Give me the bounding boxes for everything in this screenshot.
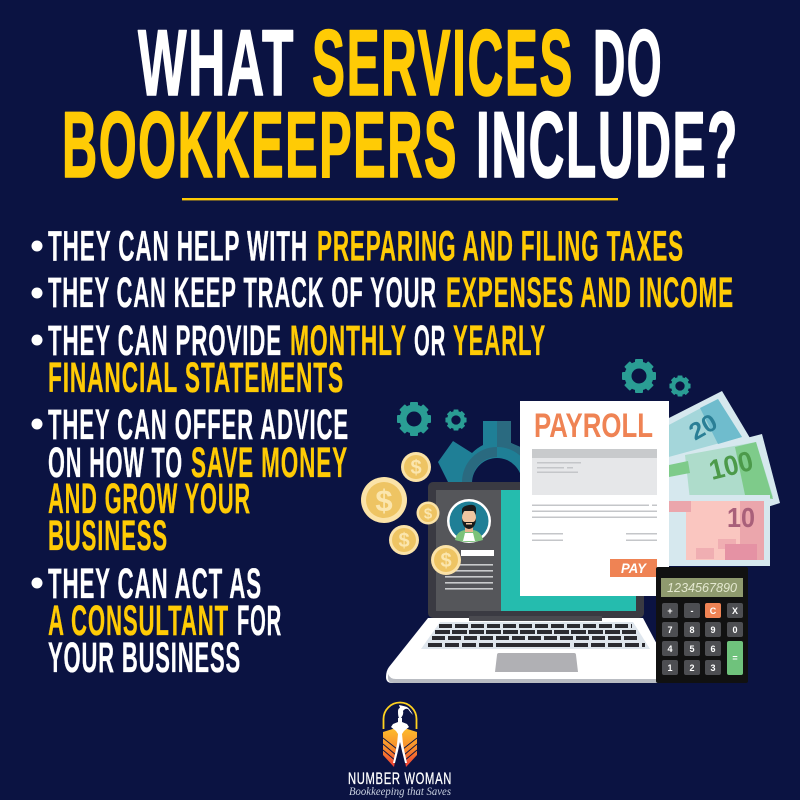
calculator: C [710, 606, 717, 616]
logo name: NUMBER WOMAN [348, 769, 452, 788]
bullet: advice: ON HOW TO [48, 439, 183, 487]
coin: $ [410, 457, 422, 479]
bullet: financial statements [32, 317, 546, 402]
banknote: 10 [665, 495, 770, 566]
bullet: advice: BUSINESS [48, 512, 168, 560]
banknotes [665, 391, 780, 566]
bullet: financial statements: FINANCIAL STATEMENTS [48, 354, 344, 402]
banknote: 20 [665, 391, 750, 462]
laptop base [386, 618, 660, 683]
bullet: consultant: A CONSULTANT [48, 597, 229, 645]
banknote: 100 [665, 434, 780, 512]
bullet: consultant: YOUR BUSINESS [48, 634, 241, 682]
title: WHAT [138, 10, 295, 115]
banknote: 100: 100 [706, 445, 756, 486]
payroll document [520, 401, 669, 596]
bullet: advice [32, 401, 349, 560]
coin: $ [398, 530, 410, 552]
calculator: 1 [667, 663, 673, 673]
calculator: 6 [710, 644, 716, 654]
bullet: advice: THEY CAN OFFER ADVICE [48, 401, 349, 449]
bullet: expenses and income: THEY CAN KEEP TRACK OF YOUR [48, 269, 437, 317]
calculator: = [732, 653, 738, 663]
icon: large gear [438, 421, 532, 484]
calculator: 8 [689, 625, 695, 635]
bullet: financial statements: OR [414, 317, 446, 365]
title [62, 10, 739, 197]
logo emblem [383, 703, 417, 767]
icon: small gears left [397, 402, 467, 436]
bullet: consultant [32, 560, 282, 682]
calculator: - [690, 606, 694, 616]
calculator: 4 [667, 644, 673, 654]
calculator: 5 [689, 644, 695, 654]
coin: $ [424, 506, 433, 522]
bullet: financial statements: YEARLY [453, 317, 546, 365]
bullet: advice: AND GROW YOUR [48, 475, 251, 523]
calculator [656, 567, 748, 683]
banknote: 20: 20 [684, 409, 722, 446]
laptop [386, 482, 660, 683]
payroll document: PAYROLL [534, 407, 653, 445]
text: FOR [237, 597, 282, 645]
calculator: 3 [710, 663, 716, 673]
logo tagline: Bookkeeping that Saves [349, 786, 451, 798]
calculator: 1234567890 [667, 580, 738, 595]
title: SERVICES [312, 10, 574, 115]
bullet: advice: SAVE MONEY [191, 439, 348, 487]
laptop screen [428, 482, 644, 621]
calculator: 9 [710, 625, 716, 635]
calculator: 2 [689, 663, 695, 673]
title: DO [593, 10, 663, 115]
coin: $ [375, 483, 393, 518]
illustration: payroll scene [361, 359, 780, 683]
pay button: PAY [621, 560, 648, 576]
banknote: 10: 10 [727, 502, 755, 533]
icon: small gears right [622, 359, 691, 397]
calculator: 7 [667, 625, 673, 635]
bullet: financial statements: MONTHLY [290, 317, 407, 365]
coins [361, 452, 461, 575]
calculator: + [667, 606, 673, 616]
bullet: preparing and filing taxes: THEY CAN HELP WITH [48, 222, 308, 270]
pay button [610, 559, 657, 577]
calculator: X [732, 606, 738, 616]
bullet: financial statements: THEY CAN PROVIDE [48, 317, 282, 365]
bullet: consultant: THEY CAN ACT AS [48, 560, 262, 608]
icon: profile avatar [447, 499, 491, 543]
logo: number woman [348, 703, 452, 798]
calculator: 0 [732, 625, 738, 635]
coin: $ [440, 550, 452, 572]
